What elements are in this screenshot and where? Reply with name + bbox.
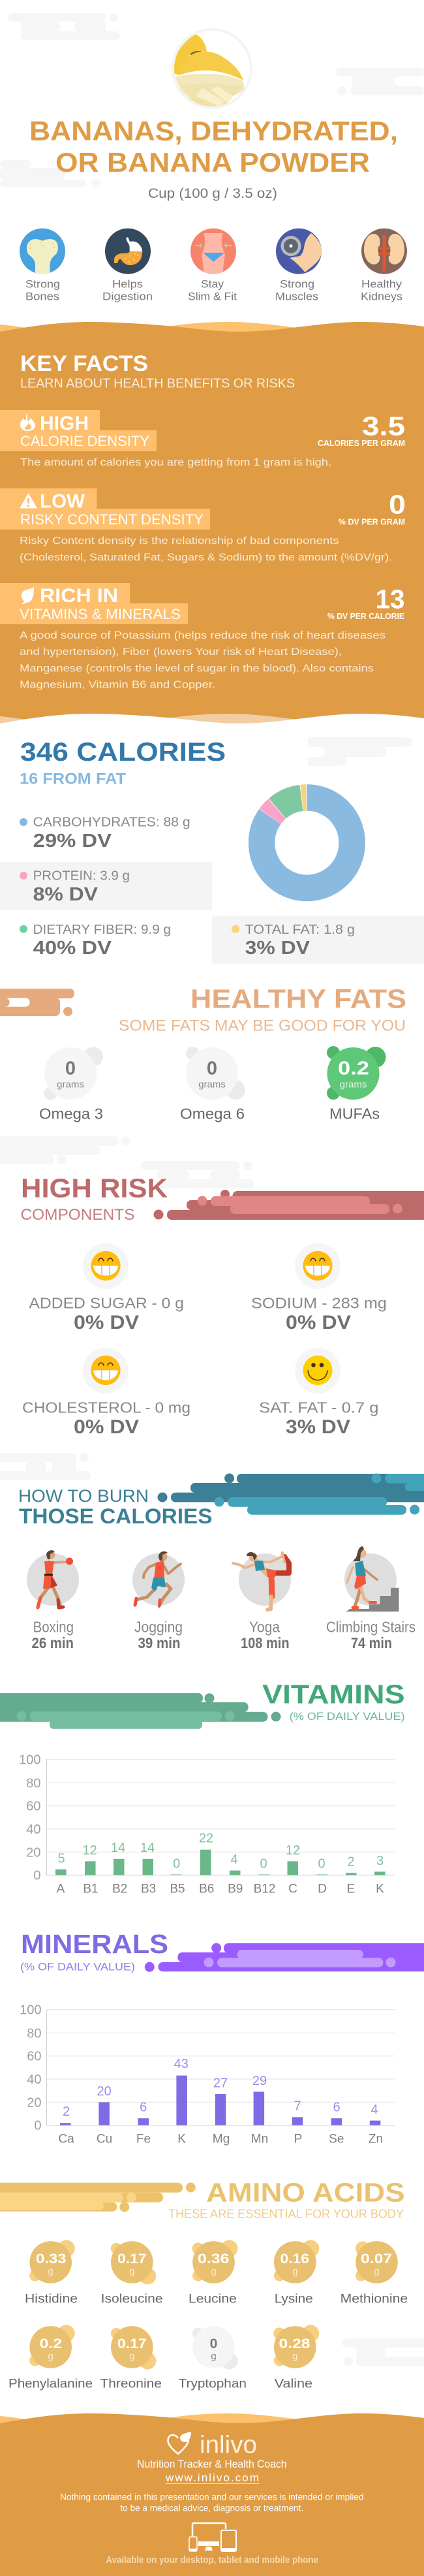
- legend: protein: 8% DV: [33, 884, 98, 905]
- footer wave: [0, 2413, 424, 2440]
- panel: minerals: [20, 1929, 424, 2146]
- fact: rich in vitamins and minerals: [0, 583, 404, 690]
- icon: devices: [189, 2523, 236, 2551]
- amino: phenylalanine: Phenylalanine: [8, 2377, 93, 2391]
- icon: grin face: [91, 1251, 121, 1280]
- legend: protein: [20, 869, 130, 905]
- bar chart: minerals: 20: [27, 2095, 42, 2110]
- fact: rich in vitamins and minerals: % DV PER CALORIE: [327, 611, 404, 621]
- amino: valine: [273, 2325, 319, 2391]
- bar chart: minerals: P: [294, 2133, 302, 2146]
- panel: vitamins: [0, 1679, 405, 1896]
- fact: low risky content density: (Cholesterol, Saturated Fat, Sugars & Sodium) to the amount (%DV/gr).: [20, 552, 392, 563]
- amino: tryptophan: Tryptophan: [179, 2377, 247, 2391]
- legend: carbohydrates: CARBOHYDRATES: 88 g: [33, 816, 190, 830]
- fat: omega 3: Omega 3: [39, 1105, 103, 1122]
- amino: lysine: [274, 2240, 319, 2306]
- legend: protein: PROTEIN: 3.9 g: [33, 869, 130, 883]
- subheading: LEARN ABOUT HEALTH BENEFITS OR RISKS: [20, 376, 295, 390]
- panel: key facts: [0, 322, 424, 733]
- fact: high calorie density: [0, 410, 405, 468]
- fact: rich in vitamins and minerals: VITAMINS & MINERALS: [20, 606, 181, 622]
- legend: dietary fiber: DIETARY FIBER: 9.9 g: [33, 923, 171, 937]
- fact: rich in vitamins and minerals: A good source of Potassium (helps reduce the risk of heart diseases: [20, 630, 386, 641]
- bar chart: vitamins: 14: [140, 1841, 155, 1855]
- bar chart: minerals: 20: [97, 2084, 112, 2099]
- amino: valine: g: [292, 2351, 297, 2362]
- bar chart: minerals: 7: [294, 2099, 301, 2114]
- fact: low risky content density: [0, 488, 406, 563]
- icon: flame: [20, 413, 35, 431]
- decorative banner: [158, 1473, 424, 1515]
- decorative banner: [0, 2182, 196, 2212]
- tagline: Nutrition Tracker & Health Coach: [137, 2458, 287, 2470]
- fact: low risky content density: % DV PER GRAM: [339, 517, 405, 526]
- background clouds: mid page: [0, 1136, 254, 1188]
- icon: climber and stairs: [346, 1546, 399, 1612]
- title: [29, 116, 398, 178]
- amino: tryptophan: [179, 2326, 247, 2391]
- bar chart: vitamins: D: [318, 1882, 327, 1896]
- heading: key facts: KEY FACTS: [20, 351, 148, 376]
- heading: VITAMINS: [262, 1679, 405, 1709]
- activity: jogging: Jogging: [134, 1618, 183, 1635]
- legend: total fat: [232, 923, 355, 959]
- fact: high calorie density: The amount of calories you are getting from 1 gram is high.: [20, 457, 331, 468]
- amino: threonine: g: [129, 2351, 134, 2362]
- amino: valine: Valine: [275, 2377, 312, 2391]
- icon: kidneys: [361, 229, 407, 274]
- logo mark: [168, 2432, 191, 2454]
- donut chart: [262, 797, 352, 888]
- disclaimer: to be a medical advice, diagnosis or treatment.: [120, 2503, 303, 2513]
- label: kidneys: Healthy: [361, 278, 402, 291]
- label: muscles: Muscles: [275, 290, 318, 302]
- icon: boxer: [38, 1550, 73, 1608]
- label: digestion: [102, 278, 153, 302]
- amino: leucine: Leucine: [189, 2293, 237, 2306]
- amino: threonine: Threonine: [100, 2377, 162, 2391]
- fat: mufas: [327, 1046, 386, 1122]
- amino: methionine: [341, 2241, 408, 2306]
- bar chart: vitamins: 0: [33, 1869, 40, 1883]
- bar chart: vitamins: 0: [173, 1857, 180, 1871]
- fact: rich in vitamins and minerals: 13: [376, 584, 404, 614]
- activity: climbing stairs: 74 min: [351, 1634, 392, 1651]
- heading: AMINO ACIDS: [206, 2178, 405, 2208]
- band bottom wave: [0, 714, 424, 733]
- band top wave: [0, 322, 424, 348]
- fat: mufas: 0.2: [338, 1058, 369, 1079]
- title: BANANAS, DEHYDRATED,: [29, 116, 398, 146]
- icon: jogger: [135, 1551, 181, 1606]
- bar chart: vitamins: C: [288, 1882, 297, 1896]
- bar chart: vitamins: 0: [318, 1857, 326, 1871]
- bar chart: vitamins: 2: [347, 1854, 355, 1869]
- bar chart: vitamins: B5: [170, 1882, 185, 1896]
- background cloud: [0, 1453, 91, 1480]
- bar chart: minerals: Mn: [251, 2133, 268, 2146]
- bar chart: minerals: Cu: [97, 2133, 112, 2146]
- activity: yoga: 108 min: [241, 1634, 290, 1651]
- fact: high calorie density: CALORIE DENSITY: [20, 433, 149, 449]
- fat: omega 6: [180, 1047, 245, 1122]
- subheading: SOME FATS MAY BE GOOD FOR YOU: [119, 1017, 406, 1034]
- fat: mufas: MUFAs: [329, 1105, 380, 1122]
- amino: lysine: Lysine: [275, 2293, 313, 2306]
- subheading: THESE ARE ESSENTIAL FOR YOUR BODY: [168, 2208, 404, 2221]
- amino: phenylalanine: 0.2: [39, 2336, 62, 2351]
- amino: histidine: [25, 2240, 78, 2306]
- heading: MINERALS: [21, 1929, 168, 1959]
- bar chart: vitamins: B12: [254, 1882, 275, 1896]
- disclaimer: Nothing contained in this presentation and our services is intended or implied: [60, 2492, 364, 2502]
- bar chart: minerals: 6: [333, 2100, 341, 2114]
- activity: climbing stairs: [326, 1546, 416, 1651]
- bar chart: minerals: 60: [27, 2050, 42, 2064]
- fact: rich in vitamins and minerals: Manganese (controls the level of sugar in the blood). Also contains: [20, 663, 374, 674]
- bar chart: vitamins: 80: [26, 1776, 40, 1790]
- icon: yoga pose: [233, 1552, 289, 1610]
- icon: smile face: [303, 1356, 333, 1385]
- fat: omega 3: grams: [57, 1079, 84, 1090]
- bar chart: minerals: Mg: [213, 2133, 230, 2146]
- heading: HEALTHY FATS: [190, 983, 406, 1013]
- label: slim and fit: Stay: [201, 278, 224, 291]
- label: strong bones: [25, 278, 60, 302]
- bar chart: vitamins: 60: [26, 1800, 40, 1814]
- component: saturated fat: [259, 1348, 378, 1438]
- fact: low risky content density: 0: [389, 489, 406, 519]
- benefit icons row: [20, 229, 407, 302]
- disclaimer: [60, 2492, 364, 2513]
- bar chart: minerals: 27: [213, 2076, 228, 2090]
- icon: slim and fit: [190, 229, 236, 278]
- bar chart: minerals: 2: [63, 2105, 70, 2119]
- activity: boxing: 26 min: [31, 1634, 74, 1651]
- bar chart: minerals: 40: [27, 2073, 42, 2087]
- amino: phenylalanine: g: [48, 2351, 53, 2362]
- bar chart: vitamins: 12: [82, 1843, 97, 1858]
- amino: lysine: 0.16: [280, 2251, 309, 2266]
- serving size: Cup (100 g / 3.5 oz): [148, 186, 277, 201]
- activity: boxing: Boxing: [33, 1618, 74, 1635]
- bar chart: minerals: Fe: [136, 2133, 151, 2146]
- bar chart: minerals: 4: [371, 2103, 378, 2117]
- decorative banner: [145, 1943, 424, 1972]
- icon: muscles: [276, 229, 322, 274]
- bar chart: vitamins: B3: [141, 1882, 156, 1896]
- bar chart: vitamins: 3: [376, 1854, 384, 1868]
- bar chart: vitamins: [19, 1753, 395, 1896]
- fact: low risky content density: Risky Content density is the relationship of bad components: [20, 535, 339, 547]
- bar chart: minerals: Zn: [369, 2133, 383, 2146]
- panel: how to burn those calories: [18, 1473, 424, 1651]
- decorative banner: [0, 989, 74, 1016]
- title: OR BANANA POWDER: [55, 147, 370, 178]
- amino: histidine: Histidine: [25, 2293, 78, 2306]
- fact: low risky content density: RISKY CONTENT DENSITY: [20, 511, 204, 528]
- panel: calories: [0, 737, 424, 964]
- label: slim and fit: [188, 278, 237, 302]
- amino: histidine: 0.33: [36, 2251, 67, 2266]
- legend: total fat: 3% DV: [245, 938, 310, 959]
- legend: dietary fiber: 40% DV: [33, 938, 112, 959]
- fact: high calorie density: 3.5: [362, 411, 405, 441]
- bar chart: vitamins: 40: [26, 1822, 40, 1837]
- bar chart: vitamins: 12: [286, 1843, 300, 1858]
- fact: rich in vitamins and minerals: RICH IN: [40, 585, 118, 607]
- amino: lysine: g: [292, 2266, 297, 2277]
- amino: methionine: g: [374, 2266, 380, 2277]
- fat: omega 6: 0: [207, 1058, 217, 1079]
- bar chart: minerals: Se: [329, 2133, 344, 2146]
- icon: warning triangle: [20, 493, 37, 508]
- amino: isoleucine: Isoleucine: [101, 2293, 163, 2306]
- label: muscles: [275, 278, 318, 302]
- fact: rich in vitamins and minerals: and hypertension), Fiber (lowers Your risk of Heart Disease),: [20, 646, 342, 658]
- heading: HIGH RISK: [21, 1173, 168, 1203]
- label: digestion: Helps: [112, 278, 143, 291]
- decorative banner: [154, 1190, 424, 1220]
- panel: healthy fats: [0, 983, 406, 1122]
- icon: strong bones: [20, 229, 65, 278]
- bar chart: vitamins: 0: [260, 1857, 267, 1871]
- icon: digestion: [105, 229, 151, 274]
- amino: leucine: [189, 2240, 237, 2306]
- amino: methionine: Methionine: [341, 2293, 408, 2306]
- label: kidneys: Kidneys: [361, 290, 402, 302]
- bar chart: vitamins: B1: [83, 1882, 98, 1896]
- panel: high risk components: [21, 1173, 424, 1438]
- hero banana photo: [172, 28, 252, 109]
- fat: mufas: grams: [340, 1079, 367, 1090]
- fat: omega 3: 0: [65, 1058, 76, 1079]
- label: strong bones: Strong: [25, 278, 60, 291]
- component: saturated fat: SAT. FAT - 0.7 g: [259, 1399, 378, 1416]
- bar chart: minerals: [20, 2003, 395, 2146]
- component: added sugar: [29, 1243, 184, 1333]
- subheading: from fat: 16 FROM FAT: [20, 771, 126, 788]
- amino: isoleucine: [101, 2241, 163, 2306]
- amino: histidine: g: [48, 2266, 53, 2277]
- fact: high calorie density: CALORIES PER GRAM: [318, 438, 405, 448]
- activity: boxing: [27, 1550, 79, 1651]
- amino: isoleucine: 0.17: [117, 2251, 146, 2266]
- panel: amino acids: [0, 2178, 408, 2391]
- heading line 2: THOSE CALORIES: [19, 1504, 213, 1528]
- bar chart: vitamins: A: [57, 1882, 65, 1896]
- component: cholesterol: [22, 1348, 190, 1438]
- label: kidneys: [361, 278, 402, 302]
- amino: tryptophan: g: [211, 2351, 217, 2362]
- bar chart: vitamins: 20: [26, 1845, 40, 1860]
- bar chart: minerals: 0: [34, 2119, 42, 2133]
- bar chart: vitamins: 4: [230, 1852, 238, 1867]
- component: cholesterol: CHOLESTEROL - 0 mg: [22, 1399, 190, 1416]
- bar chart: vitamins: E: [347, 1882, 355, 1896]
- amino: threonine: 0.17: [117, 2336, 146, 2351]
- bar chart: minerals: 6: [140, 2100, 147, 2114]
- footer: [0, 2413, 424, 2576]
- bar chart: vitamins: 22: [199, 1832, 213, 1846]
- label: strong bones: Bones: [25, 290, 59, 302]
- icon: grin face: [303, 1251, 333, 1280]
- component: cholesterol: 0% DV: [74, 1416, 139, 1438]
- activity: jogging: [132, 1551, 185, 1651]
- logo wordmark: inlivo: [200, 2432, 257, 2459]
- label: digestion: Digestion: [102, 290, 153, 302]
- amino: leucine: 0.36: [198, 2251, 230, 2266]
- amino: leucine: g: [211, 2266, 217, 2277]
- background cloud: [308, 737, 412, 766]
- fat: omega 3: [39, 1047, 103, 1122]
- fat: omega 6: grams: [198, 1079, 226, 1090]
- bar chart: minerals: 100: [20, 2003, 42, 2018]
- amino: tryptophan: 0: [210, 2336, 217, 2351]
- bar chart: minerals: Ca: [58, 2133, 74, 2146]
- bar chart: vitamins: 100: [19, 1753, 40, 1768]
- component: saturated fat: 3% DV: [286, 1416, 350, 1438]
- bar chart: minerals: 29: [252, 2074, 267, 2088]
- fact: high calorie density: HIGH: [40, 413, 89, 434]
- heading: calories: 346 CALORIES: [20, 738, 226, 767]
- label: slim and fit: Slim & Fit: [188, 290, 237, 302]
- icon: grin face: [91, 1356, 121, 1385]
- amino: valine: 0.28: [279, 2336, 310, 2351]
- component: added sugar: 0% DV: [74, 1312, 139, 1333]
- background clouds: header: [0, 13, 424, 188]
- bar chart: vitamins: B6: [199, 1882, 214, 1896]
- bar chart: vitamins: B2: [112, 1882, 127, 1896]
- bar chart: vitamins: K: [376, 1882, 384, 1896]
- legend: carbohydrates: 29% DV: [33, 831, 112, 851]
- subheading: COMPONENTS: [21, 1206, 134, 1224]
- fat: omega 6: Omega 6: [180, 1105, 245, 1122]
- background cloud: [342, 2338, 424, 2366]
- subheading: (% OF DAILY VALUE): [290, 1710, 405, 1723]
- component: sodium: [251, 1243, 387, 1333]
- fact: low risky content density: LOW: [40, 491, 85, 513]
- heading line 1: HOW TO BURN: [18, 1486, 149, 1506]
- amino: phenylalanine: [8, 2325, 93, 2391]
- activity: yoga: Yoga: [249, 1618, 280, 1635]
- bar chart: vitamins: 5: [57, 1851, 65, 1866]
- legend: carbohydrates: [20, 816, 190, 851]
- website link: www.inlivo.com: [165, 2472, 259, 2484]
- amino: isoleucine: g: [129, 2266, 134, 2277]
- amino: methionine: 0.07: [361, 2251, 392, 2266]
- bar chart: vitamins: B9: [228, 1882, 243, 1896]
- bar chart: minerals: 43: [174, 2057, 189, 2071]
- label: muscles: Strong: [280, 278, 314, 291]
- bar chart: minerals: K: [177, 2133, 186, 2146]
- amino: threonine: [100, 2326, 162, 2391]
- component: added sugar: ADDED SUGAR - 0 g: [29, 1294, 184, 1311]
- activity: yoga: [233, 1552, 291, 1651]
- availability note: Available on your desktop, tablet and mobile phone: [106, 2554, 318, 2566]
- legend: total fat: TOTAL FAT: 1.8 g: [245, 923, 355, 937]
- activity: jogging: 39 min: [138, 1634, 180, 1651]
- bar chart: minerals: 80: [27, 2026, 42, 2041]
- component: sodium: 0% DV: [286, 1312, 351, 1333]
- legend: dietary fiber: [20, 923, 171, 959]
- component: sodium: SODIUM - 283 mg: [251, 1294, 387, 1311]
- icon: leaf: [22, 587, 34, 605]
- subheading: (% OF DAILY VALUE): [20, 1960, 135, 1973]
- decorative banner: [0, 1693, 280, 1729]
- fact: rich in vitamins and minerals: Magnesium, Vitamin B6 and Copper.: [20, 679, 215, 690]
- bar chart: vitamins: 14: [111, 1841, 125, 1855]
